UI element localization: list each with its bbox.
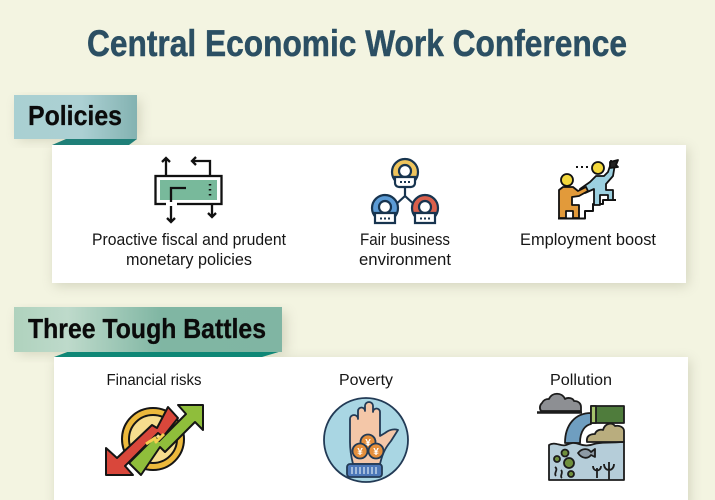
text: financial risks: Financial risks: [106, 372, 202, 389]
text: employment boost: Employment boost: [520, 231, 656, 249]
icon: poverty hand with coins: ¥: [357, 447, 363, 458]
icon: pollution pipe and water: [537, 394, 624, 480]
text: fair business environment: environment: [359, 251, 451, 269]
panel background: policies: [52, 145, 686, 283]
text: proactive fiscal and prudent monetary policies: monetary policies: [126, 251, 252, 269]
panel background: battles: [54, 357, 688, 500]
icon: people climbing stairs: [558, 160, 618, 218]
icon: financial risks arrows: [106, 405, 203, 475]
text: proactive fiscal and prudent monetary policies: Proactive fiscal and prudent: [92, 231, 286, 249]
heading ribbon: Three Tough Battles: Three Tough Battles: [28, 313, 266, 344]
icon: poverty hand with coins: ¥: [373, 447, 379, 458]
text: fair business environment: Fair business: [360, 231, 450, 249]
panel: three tough battles: [14, 307, 690, 500]
text: pollution: Pollution: [550, 372, 612, 389]
heading ribbon: Three Tough Battles: [14, 307, 282, 357]
heading ribbon: Policies: [14, 95, 137, 145]
icon: fair business network: [372, 159, 438, 223]
icon: poverty hand with coins: [324, 398, 408, 482]
heading ribbon: Policies: Policies: [28, 100, 122, 131]
icon: fiscal and monetary flow: [156, 157, 222, 222]
panel: policies: [14, 95, 688, 286]
icon: poverty hand with coins: ¥: [365, 438, 371, 449]
title: Central Economic Work Conference: [87, 23, 627, 64]
text: poverty: Poverty: [339, 372, 393, 389]
